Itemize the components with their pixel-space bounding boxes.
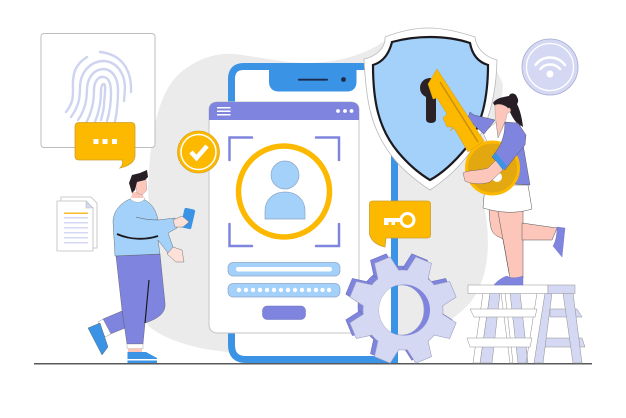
ladder back legs and rungs xyxy=(480,293,585,363)
woman skirt xyxy=(483,185,532,212)
card header bar xyxy=(209,102,359,120)
man head xyxy=(129,170,148,198)
man front shoe xyxy=(128,352,157,363)
man front sock xyxy=(127,344,143,352)
document icon xyxy=(57,197,97,251)
gear xyxy=(345,253,457,364)
man sleeve crease xyxy=(136,217,158,220)
phone xyxy=(232,63,394,360)
key xyxy=(428,69,518,194)
login card xyxy=(209,102,359,333)
man hand xyxy=(173,216,189,227)
gear hole xyxy=(378,284,430,336)
man xyxy=(88,170,195,363)
ladder xyxy=(467,285,585,363)
keyhole xyxy=(420,78,440,123)
speech bubble: dots xyxy=(75,122,135,168)
man pants xyxy=(116,254,165,344)
icon: fingerprint xyxy=(66,52,131,123)
gear shadow side xyxy=(345,253,453,361)
submit button xyxy=(262,306,306,320)
ladder front frame xyxy=(467,285,575,363)
check badge xyxy=(178,131,220,173)
man back shoe xyxy=(88,323,108,355)
woman legs xyxy=(489,208,557,278)
man belt strap xyxy=(117,234,158,239)
fingerprint card xyxy=(41,34,155,148)
scan frame brackets xyxy=(230,138,339,246)
woman shoes xyxy=(494,227,565,285)
man phone xyxy=(180,208,195,229)
illustration xyxy=(34,28,592,364)
woman arm holding key xyxy=(463,122,526,184)
speech bubble: key xyxy=(370,201,430,247)
woman shirt xyxy=(483,122,505,152)
man back sock xyxy=(98,319,111,337)
man back leg xyxy=(103,311,125,335)
woman jacket xyxy=(495,122,530,185)
woman xyxy=(483,122,565,285)
username field xyxy=(228,262,340,276)
woman left sleeve xyxy=(468,112,495,134)
ground line xyxy=(34,363,592,364)
woman face xyxy=(495,104,511,138)
gear face xyxy=(349,256,457,364)
shield xyxy=(364,28,497,190)
man sweater xyxy=(113,199,177,256)
profile avatar ring xyxy=(238,146,330,237)
man lower hand xyxy=(167,246,184,262)
woman hair xyxy=(493,93,523,127)
password field xyxy=(228,284,340,297)
wifi badge xyxy=(522,39,578,95)
background blob xyxy=(146,42,503,354)
man collar xyxy=(130,196,145,202)
